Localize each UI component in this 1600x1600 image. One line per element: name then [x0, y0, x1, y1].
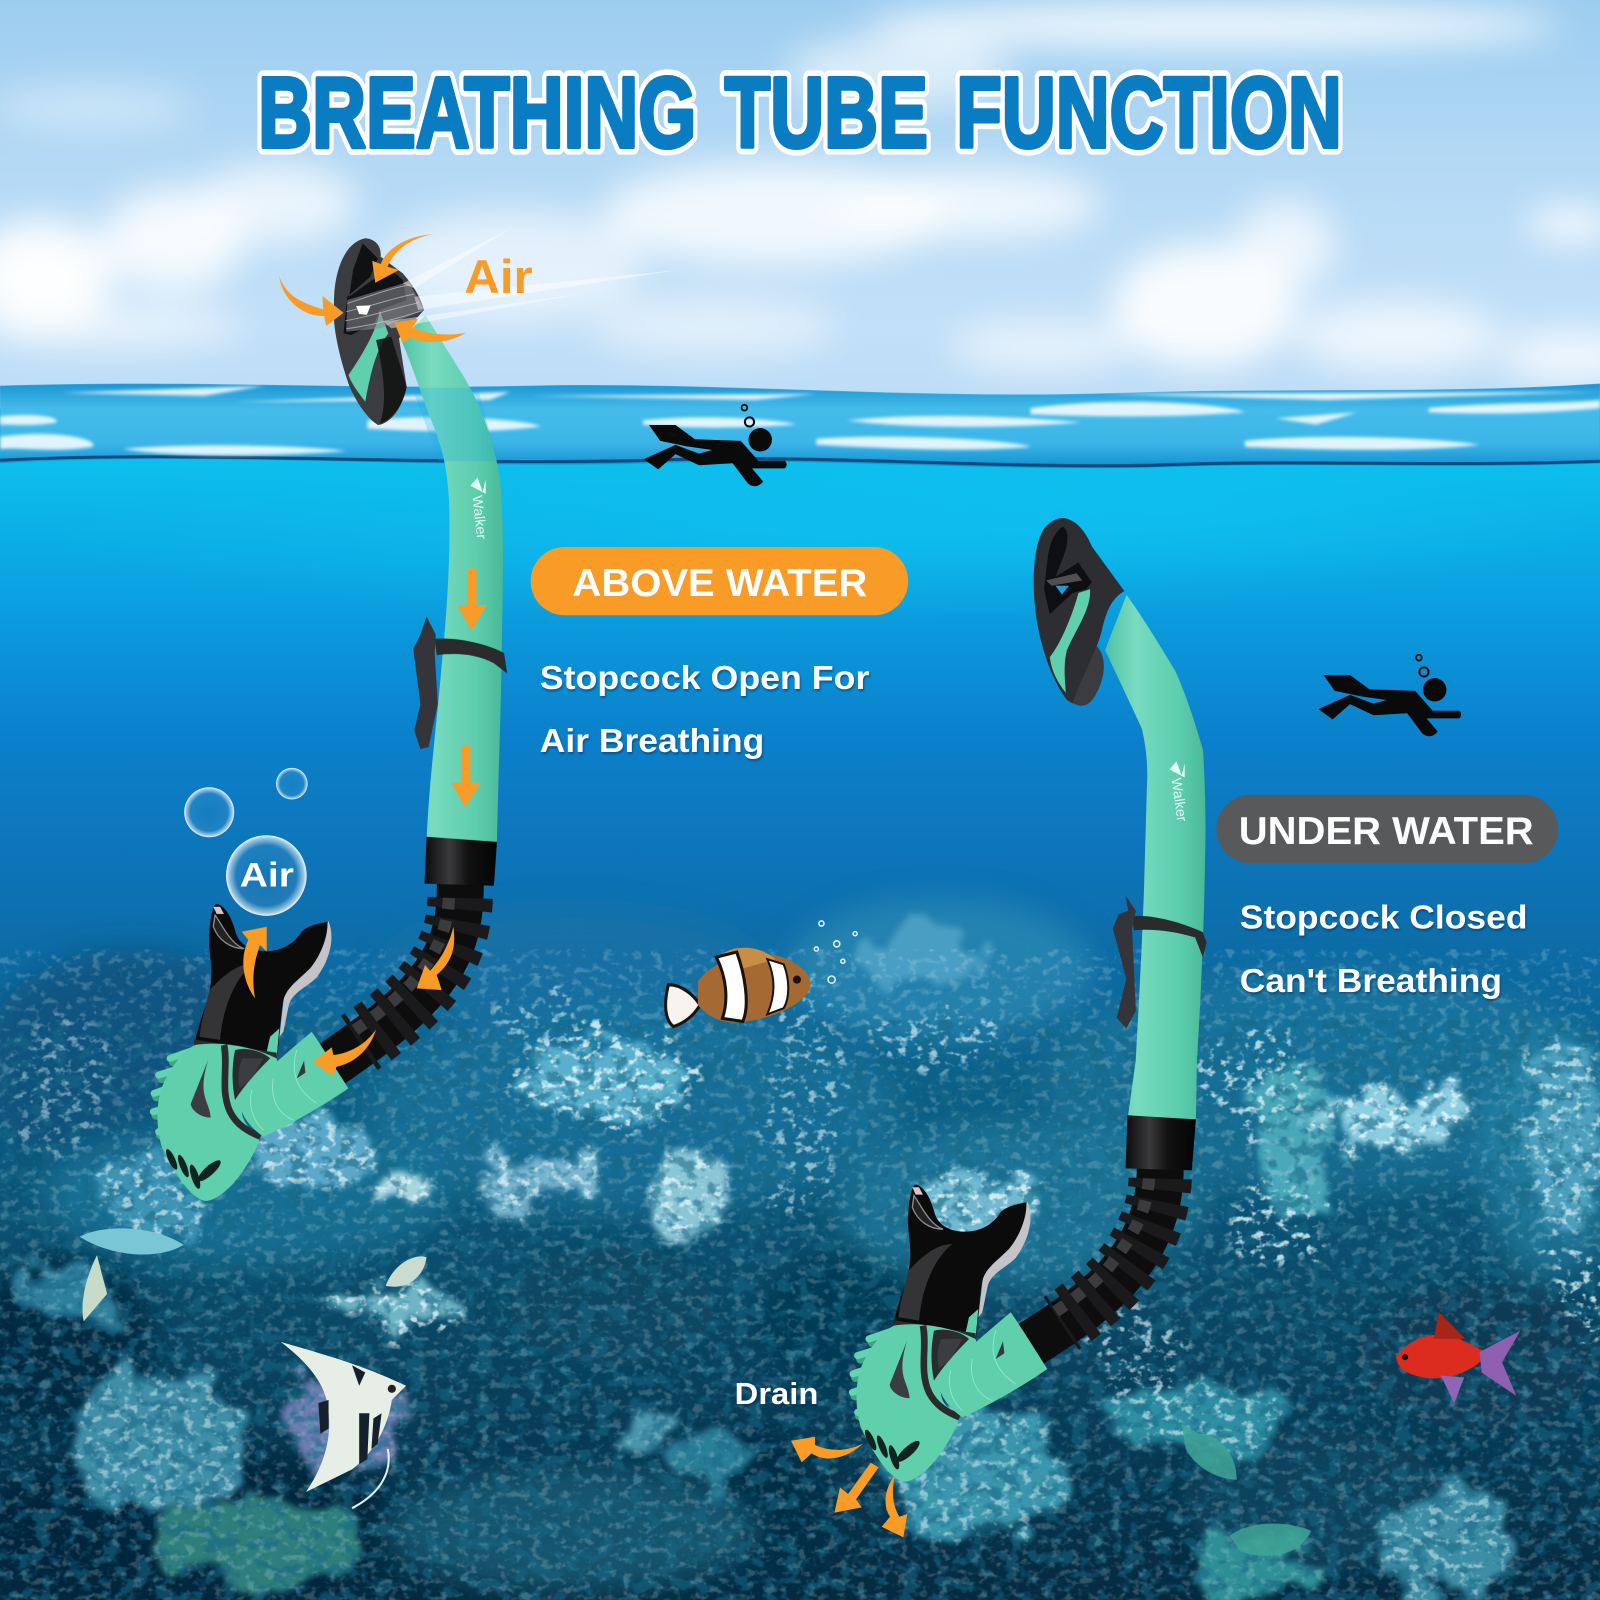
- tube clip: [1113, 896, 1207, 1029]
- coral reef: [0, 857, 1600, 1600]
- snorkel: under water: [791, 518, 1207, 1537]
- logo on tube: Walker: [468, 495, 489, 540]
- text: above water description: Stopcock Open For: [540, 660, 869, 697]
- swimmer icon: under water: [1318, 655, 1461, 736]
- air bubbles: [184, 768, 308, 916]
- water surface band: [0, 384, 1600, 468]
- text: under water description: [1240, 900, 1528, 1000]
- water tint over tube: [412, 388, 498, 461]
- air bubbles: Air: [240, 857, 294, 895]
- mouthpiece: [852, 1185, 1047, 1482]
- text: under water description: Can't Breathing: [1240, 963, 1502, 1000]
- black collar: [424, 837, 497, 886]
- text: above water description: Air Breathing: [540, 723, 764, 760]
- text: under water description: Stopcock Closed: [1240, 900, 1528, 937]
- flexible hose: [1022, 1163, 1160, 1349]
- logo on tube: Walker: [1167, 777, 1189, 823]
- tube: [1105, 595, 1206, 1119]
- pill: under water: [1216, 795, 1558, 863]
- drain arrows: [791, 1437, 907, 1537]
- snorkel: above water: [153, 227, 678, 1201]
- underwater background: [0, 439, 1600, 1600]
- label: Air at snorkel top: Air: [464, 251, 533, 303]
- goldfish: [1396, 1312, 1520, 1403]
- small reef fish: [80, 1228, 427, 1321]
- air arrows: [279, 234, 466, 343]
- label: Drain: Drain: [735, 1377, 818, 1411]
- swimmer icon: surface: [644, 405, 787, 486]
- mouthpiece: [153, 904, 348, 1201]
- tube: [401, 315, 503, 842]
- flexible hose: [324, 883, 460, 1069]
- clownfish: [666, 921, 857, 1027]
- flow arrows: [242, 568, 487, 1076]
- purge valve: [279, 227, 678, 425]
- pill: under water: UNDER WATER: [1239, 810, 1534, 853]
- pill: above water: ABOVE WATER: [572, 562, 867, 605]
- purge valve: [1034, 518, 1124, 706]
- angelfish: [281, 1342, 406, 1508]
- text: above water description: [540, 660, 869, 760]
- black collar: [1126, 1115, 1196, 1170]
- sky background: [0, 0, 1600, 408]
- reef green fish: [1182, 1423, 1311, 1556]
- tube clip: [413, 616, 507, 749]
- pill: above water: [531, 547, 908, 615]
